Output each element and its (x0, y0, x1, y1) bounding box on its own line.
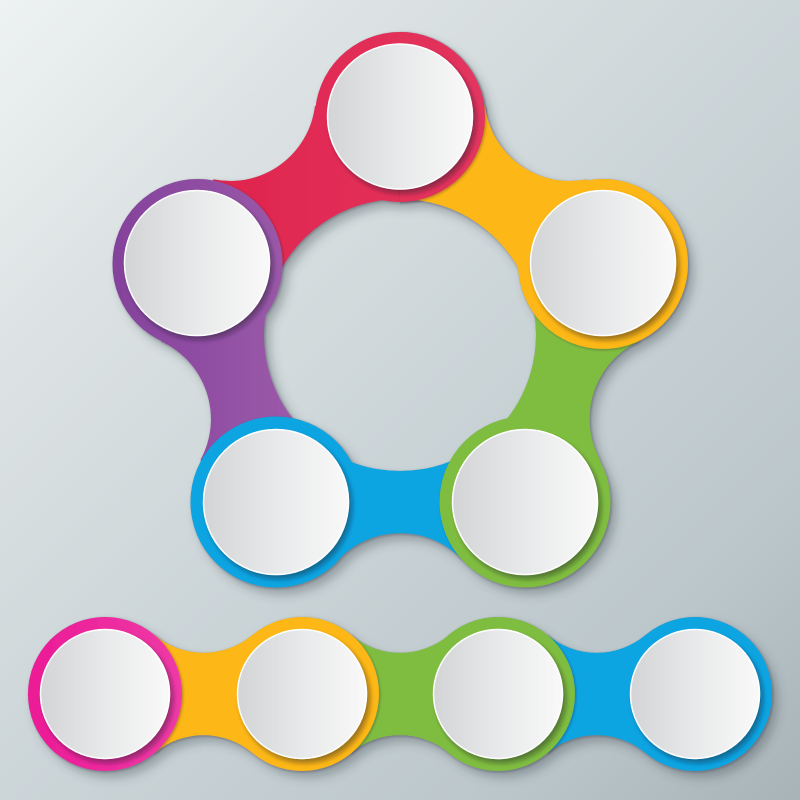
blank disc: lower left (204, 430, 348, 574)
chart: five-node pentagon ring (112, 32, 688, 588)
outer shadow of the chain (28, 617, 772, 771)
blank disc: third (434, 630, 562, 758)
blank disc: lower right (452, 430, 598, 574)
node: blue with connector (498, 617, 772, 771)
red ring overlap on the yellow connector (400, 32, 488, 204)
node: purple left with connector (112, 179, 318, 502)
node: yellow with connector (105, 617, 379, 771)
node: red top with connector (197, 32, 485, 290)
blank disc: top (328, 44, 472, 189)
blank disc: left (124, 190, 270, 336)
blank disc: right (530, 190, 676, 336)
node: magenta ring (28, 617, 182, 771)
blank disc: second (238, 630, 366, 758)
node: green with connector (302, 617, 575, 771)
blank disc: first (40, 630, 170, 758)
chart: four-node horizontal chain (28, 617, 772, 771)
node: blue lower left with connector (190, 416, 525, 588)
node: green lower right with connector (440, 264, 639, 588)
node: yellow right with connector (400, 106, 688, 349)
outer shadow of the pentagon ring (112, 32, 688, 588)
blank disc: fourth (630, 630, 760, 758)
